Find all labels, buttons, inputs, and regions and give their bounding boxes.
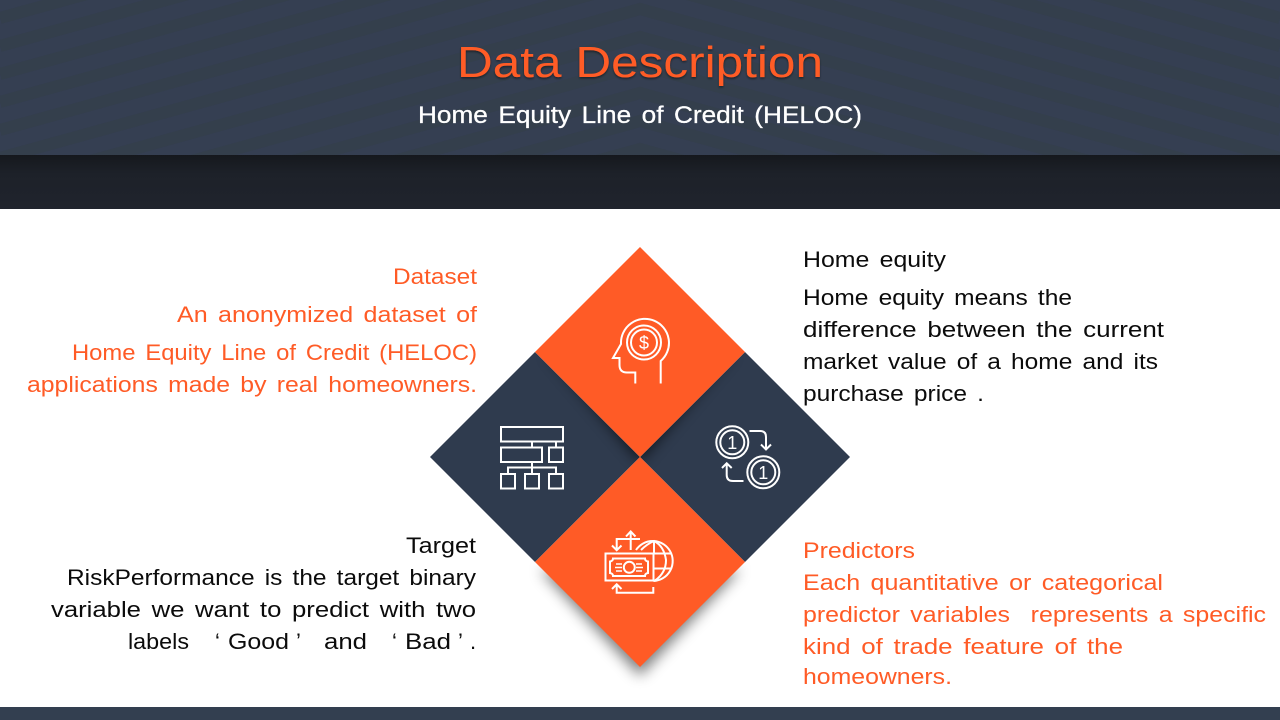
diamond: left dark bbox=[430, 352, 640, 562]
text block: target: variable we want to predict with two bbox=[51, 597, 476, 622]
text block: target bbox=[51, 533, 476, 654]
text block: target: Bad bbox=[405, 629, 451, 654]
text block: target: Good bbox=[228, 629, 289, 654]
text block: predictors: Each quantitative or categorical bbox=[803, 570, 1163, 595]
subtitle: Home Equity Line of Credit (HELOC) bbox=[418, 102, 862, 129]
text block: dataset bbox=[27, 264, 478, 397]
text block: home equity: Home equity bbox=[803, 247, 946, 272]
icon: coin exchange: 1 bbox=[758, 463, 768, 483]
title: Data Description bbox=[457, 38, 823, 87]
text block: home equity: purchase price . bbox=[803, 381, 984, 406]
text block: predictors bbox=[803, 538, 1266, 689]
text block: dataset: An anonymized dataset of bbox=[177, 302, 478, 327]
diamond: bottom orange bbox=[535, 457, 745, 667]
text block: dataset: Dataset bbox=[393, 264, 477, 289]
text block: target: labels bbox=[128, 629, 189, 654]
footer bar bbox=[0, 707, 1280, 720]
diamond: right dark bbox=[640, 352, 850, 562]
text block: predictors: homeowners. bbox=[803, 664, 952, 689]
text block: target: Target bbox=[406, 533, 476, 558]
text block: predictors: predictor variables represents a specific bbox=[803, 602, 1266, 627]
shadow of top diamond on dark diamonds bbox=[558, 376, 722, 462]
text block: target: ’ bbox=[458, 629, 463, 654]
text block: predictors: Predictors bbox=[803, 538, 915, 563]
text block: home equity: market value of a home and its bbox=[803, 349, 1158, 374]
text block: target: and bbox=[324, 629, 367, 654]
text block: target: ’ bbox=[296, 629, 301, 654]
icon: coin exchange: 1 bbox=[727, 433, 737, 453]
icon: hierarchy chart bbox=[501, 427, 563, 488]
text block: predictors: kind of trade feature of the bbox=[803, 634, 1123, 659]
icon: coin exchange bbox=[716, 426, 779, 488]
text block: dataset: Home Equity Line of Credit (HELOC) bbox=[72, 340, 477, 365]
icon: head with dollar: $ bbox=[639, 333, 649, 353]
icon: head with dollar bbox=[613, 319, 669, 384]
text block: home equity: difference between the current bbox=[803, 317, 1164, 342]
text block: target: ‘ bbox=[392, 629, 397, 654]
text block: home equity bbox=[803, 247, 1164, 406]
text block: dataset: applications made by real homeowners. bbox=[27, 372, 477, 397]
dark shadow band under header bbox=[0, 155, 1280, 209]
icon: banknote and globe bbox=[606, 532, 673, 593]
diamond shadow: bottom bbox=[540, 570, 740, 676]
header band bbox=[0, 0, 1280, 155]
text block: target: ‘ bbox=[215, 629, 220, 654]
text block: target: RiskPerformance is the target binary bbox=[67, 565, 476, 590]
text block: home equity: Home equity means the bbox=[803, 285, 1072, 310]
text block: target: . bbox=[470, 629, 476, 654]
diamond: top orange bbox=[535, 247, 745, 457]
